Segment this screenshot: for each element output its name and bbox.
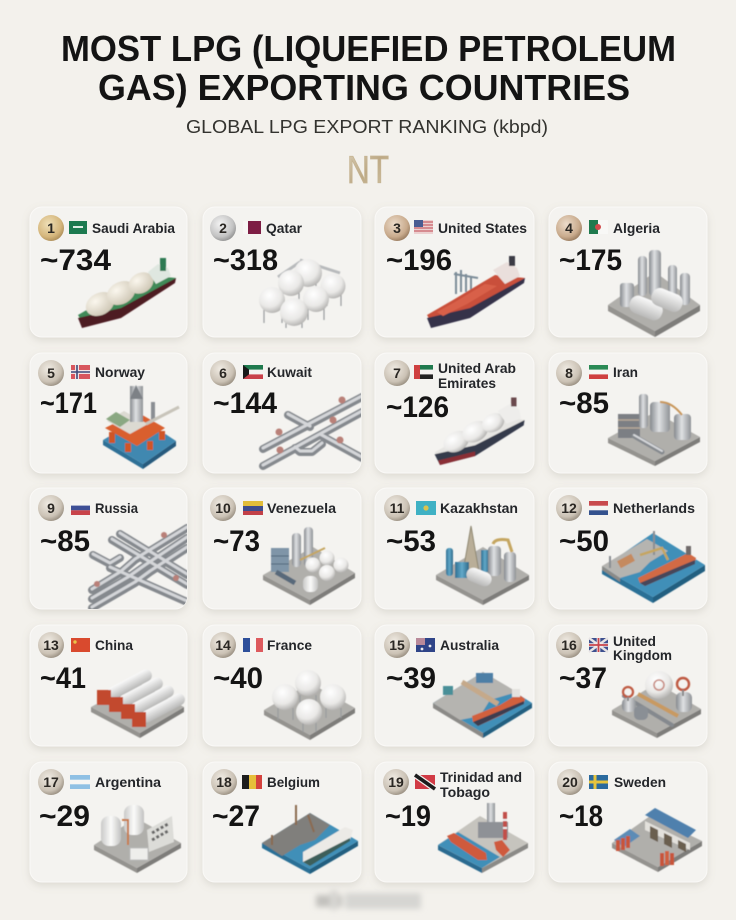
- panel: rank 7 United Arab Emirates: [375, 353, 534, 473]
- country name: Russia: [95, 500, 138, 516]
- export value: ~175: [559, 244, 622, 277]
- flag: Algeria: [589, 220, 608, 234]
- card background: [375, 762, 534, 882]
- logo: NT monogram: NT: [347, 149, 389, 192]
- export value: ~73: [213, 525, 260, 558]
- illustration: port with orange tanker: [602, 531, 705, 603]
- card background: [30, 207, 187, 337]
- export value: ~144: [213, 387, 277, 420]
- card background: [549, 488, 707, 609]
- rank badge 17: 17: [43, 774, 59, 790]
- panel: rank 20 Sweden: [549, 762, 707, 882]
- card background: [203, 207, 361, 337]
- export value: ~734: [40, 244, 111, 277]
- card background: [375, 488, 534, 609]
- rank badge 18: [211, 769, 237, 795]
- card background: [375, 207, 534, 337]
- export value: ~40: [213, 662, 263, 695]
- flag: Saudi Arabia: [69, 221, 87, 234]
- panel: rank 16 United Kingdom: [549, 625, 707, 746]
- rank badge 9: 9: [47, 500, 55, 516]
- country name: Netherlands: [613, 500, 695, 516]
- illustration: spheres on platform: [264, 670, 355, 740]
- rank badge 6: [210, 360, 236, 386]
- country name: Saudi Arabia: [92, 220, 175, 236]
- flag: Sweden: [589, 775, 608, 789]
- card background: [375, 353, 534, 473]
- country name: [438, 360, 516, 391]
- panel: rank 15 Australia: [375, 625, 534, 746]
- flag: France: [243, 638, 263, 652]
- illustration: crossing pipelines: [92, 527, 187, 608]
- country name: Kazakhstan: [440, 500, 518, 516]
- rank badge 19: [383, 769, 409, 795]
- panel: rank 13 China: [30, 625, 187, 746]
- country name: Trinidad and: [440, 769, 522, 785]
- rank badge 2: [210, 215, 236, 241]
- card background: [375, 625, 534, 746]
- flag: Iran: [589, 365, 608, 379]
- country name: United: [613, 633, 656, 649]
- rank badge 3: 3: [393, 220, 401, 236]
- rank badge 16: [556, 632, 582, 658]
- rank badge 1: 1: [47, 220, 55, 236]
- country name: Australia: [440, 637, 499, 653]
- country name: China: [95, 637, 133, 653]
- illustration: sphere, valves and pipes: [612, 671, 701, 738]
- rank badge 14: 14: [215, 637, 231, 653]
- country name: [440, 769, 522, 800]
- illustration: warehouse with gas cylinders: [612, 808, 702, 872]
- rank badge 17: [38, 769, 64, 795]
- rank badge 20: 20: [562, 774, 578, 790]
- panel: rank 8 Iran: [549, 353, 707, 473]
- rank badge 18: 18: [216, 774, 232, 790]
- card background: [549, 353, 707, 473]
- panel: rank 10 Venezuela: [203, 488, 361, 609]
- flag: Norway: [71, 365, 90, 379]
- rank badge 8: [556, 360, 582, 386]
- flag: United Kingdom: [589, 638, 608, 652]
- flag: United Arab Emirates: [414, 365, 433, 379]
- card background: [203, 488, 361, 609]
- flag: Kazakhstan: [416, 501, 436, 515]
- rank badge 20: [557, 769, 583, 795]
- rank badge 9: [38, 495, 64, 521]
- card background: [549, 762, 707, 882]
- title: GAS) EXPORTING COUNTRIES: [98, 67, 630, 108]
- rank badge 8: 8: [565, 365, 573, 381]
- rank badge 10: 10: [215, 500, 231, 516]
- export value: ~171: [40, 387, 97, 420]
- flag: Australia: [416, 638, 435, 652]
- illustration: coastal refinery with tankers: [438, 803, 528, 873]
- rank badge 12: [556, 495, 582, 521]
- panel: rank 11 Kazakhstan: [375, 488, 534, 609]
- card background: [30, 762, 187, 882]
- illustration: offshore oil platform: [103, 385, 179, 469]
- rank badge 5: 5: [47, 365, 55, 381]
- illustration: processing plant: [608, 394, 700, 466]
- panel: rank 5 Norway: [30, 353, 187, 473]
- rank badge 2: 2: [219, 220, 227, 236]
- title: MOST LPG (LIQUEFIED PETROLEUM: [61, 28, 676, 69]
- panel: rank 9 Russia: [30, 488, 187, 609]
- card background: [30, 353, 187, 473]
- export value: ~19: [385, 800, 431, 833]
- export value: ~29: [39, 800, 90, 833]
- rank badge 3: [384, 215, 410, 241]
- panel: rank 17 Argentina: [30, 762, 187, 882]
- panel: rank 4 Algeria: [549, 207, 707, 337]
- country name: France: [267, 637, 312, 653]
- panel: rank 1 Saudi Arabia: [30, 207, 187, 337]
- rank badge 14: [210, 632, 236, 658]
- country name: Kingdom: [613, 647, 672, 663]
- rank badge 13: [38, 632, 64, 658]
- export value: ~126: [386, 391, 449, 424]
- country name: Tobago: [440, 784, 490, 800]
- subtitle: GLOBAL LPG EXPORT RANKING (kbpd): [186, 116, 548, 137]
- rank badge 15: 15: [389, 637, 405, 653]
- export value: ~37: [559, 662, 607, 695]
- country name: Kuwait: [267, 364, 312, 380]
- rank badge 16: 16: [561, 637, 577, 653]
- card background: [549, 207, 707, 337]
- illustration: spherical storage tanks: [259, 259, 346, 328]
- flag: Netherlands: [589, 501, 608, 515]
- illustration: jetty with white tanker: [262, 805, 358, 874]
- rank badge 7: 7: [393, 365, 401, 381]
- rank badge 10: [210, 495, 236, 521]
- export value: ~27: [212, 800, 260, 833]
- flag: Kuwait: [243, 365, 263, 379]
- rank badge 5: [38, 360, 64, 386]
- country name: [613, 633, 672, 663]
- rank badge 4: [556, 215, 582, 241]
- flag: Argentina: [70, 775, 90, 789]
- country name: Venezuela: [267, 500, 336, 516]
- illustration: white LNG tanker: [435, 398, 525, 465]
- panel: rank 14 France: [203, 625, 361, 746]
- illustration: green LNG tanker: [78, 258, 176, 328]
- flag: United States: [414, 220, 433, 234]
- export value: ~85: [40, 525, 90, 558]
- rank badge 11: 11: [390, 500, 405, 516]
- card background: [30, 488, 187, 609]
- illustration: columns and storage on platform: [263, 527, 355, 605]
- export value: ~18: [559, 800, 603, 833]
- illustration: derrick and tanks on platform: [436, 526, 529, 605]
- illustration: white tanks and control panel: [94, 805, 181, 873]
- rank badge 1: [38, 215, 64, 241]
- rank badge 4: 4: [565, 220, 573, 236]
- panel: rank 3 United States: [375, 207, 534, 337]
- rank badge 7: [384, 360, 410, 386]
- export value: ~53: [386, 525, 436, 558]
- flag: Belgium: [242, 775, 262, 789]
- card background: [203, 625, 361, 746]
- blurred watermark: [316, 890, 421, 910]
- illustration: pipelines with valves: [263, 396, 362, 466]
- rank badge 13: 13: [43, 637, 59, 653]
- country name: Emirates: [438, 375, 496, 391]
- export value: ~196: [386, 244, 452, 277]
- card background: [30, 625, 187, 746]
- panel: rank 12 Netherlands: [549, 488, 707, 609]
- illustration: red LNG tanker with loading arms: [427, 256, 525, 328]
- panel: rank 6 Kuwait: [203, 353, 362, 473]
- country name: United Arab: [438, 360, 516, 376]
- card background: [549, 625, 707, 746]
- country name: Argentina: [95, 774, 161, 790]
- country name: Sweden: [614, 774, 666, 790]
- panel: rank 19 Trinidad and Tobago: [375, 762, 534, 882]
- export value: ~41: [40, 662, 86, 695]
- rank badge 15: [384, 632, 410, 658]
- country name: Belgium: [267, 774, 320, 790]
- country name: Norway: [95, 364, 145, 380]
- flag: China: [71, 638, 90, 652]
- country name: Iran: [613, 364, 638, 380]
- title: [61, 28, 676, 108]
- country name: United States: [438, 220, 527, 236]
- export value: ~85: [559, 387, 609, 420]
- card background: [203, 353, 361, 473]
- flag: Trinidad and Tobago: [415, 775, 435, 789]
- rank badge 6: 6: [219, 365, 227, 381]
- export value: ~318: [213, 244, 278, 277]
- panel: rank 18 Belgium: [203, 762, 361, 882]
- flag: Qatar: [243, 221, 261, 234]
- country name: Qatar: [266, 220, 303, 236]
- illustration: horizontal gas cylinders: [91, 667, 187, 738]
- rank badge 11: [384, 495, 410, 521]
- country name: Algeria: [613, 220, 660, 236]
- flag: Russia: [71, 501, 90, 515]
- rank badge 19: 19: [388, 774, 404, 790]
- illustration: port terminal with tanker: [433, 672, 532, 738]
- export value: ~39: [386, 662, 436, 695]
- export value: ~50: [559, 525, 609, 558]
- illustration: refinery on platform: [608, 250, 700, 337]
- panel: rank 2 Qatar: [203, 207, 361, 337]
- card background: [203, 762, 361, 882]
- flag: Venezuela: [243, 501, 263, 515]
- rank badge 12: 12: [561, 500, 577, 516]
